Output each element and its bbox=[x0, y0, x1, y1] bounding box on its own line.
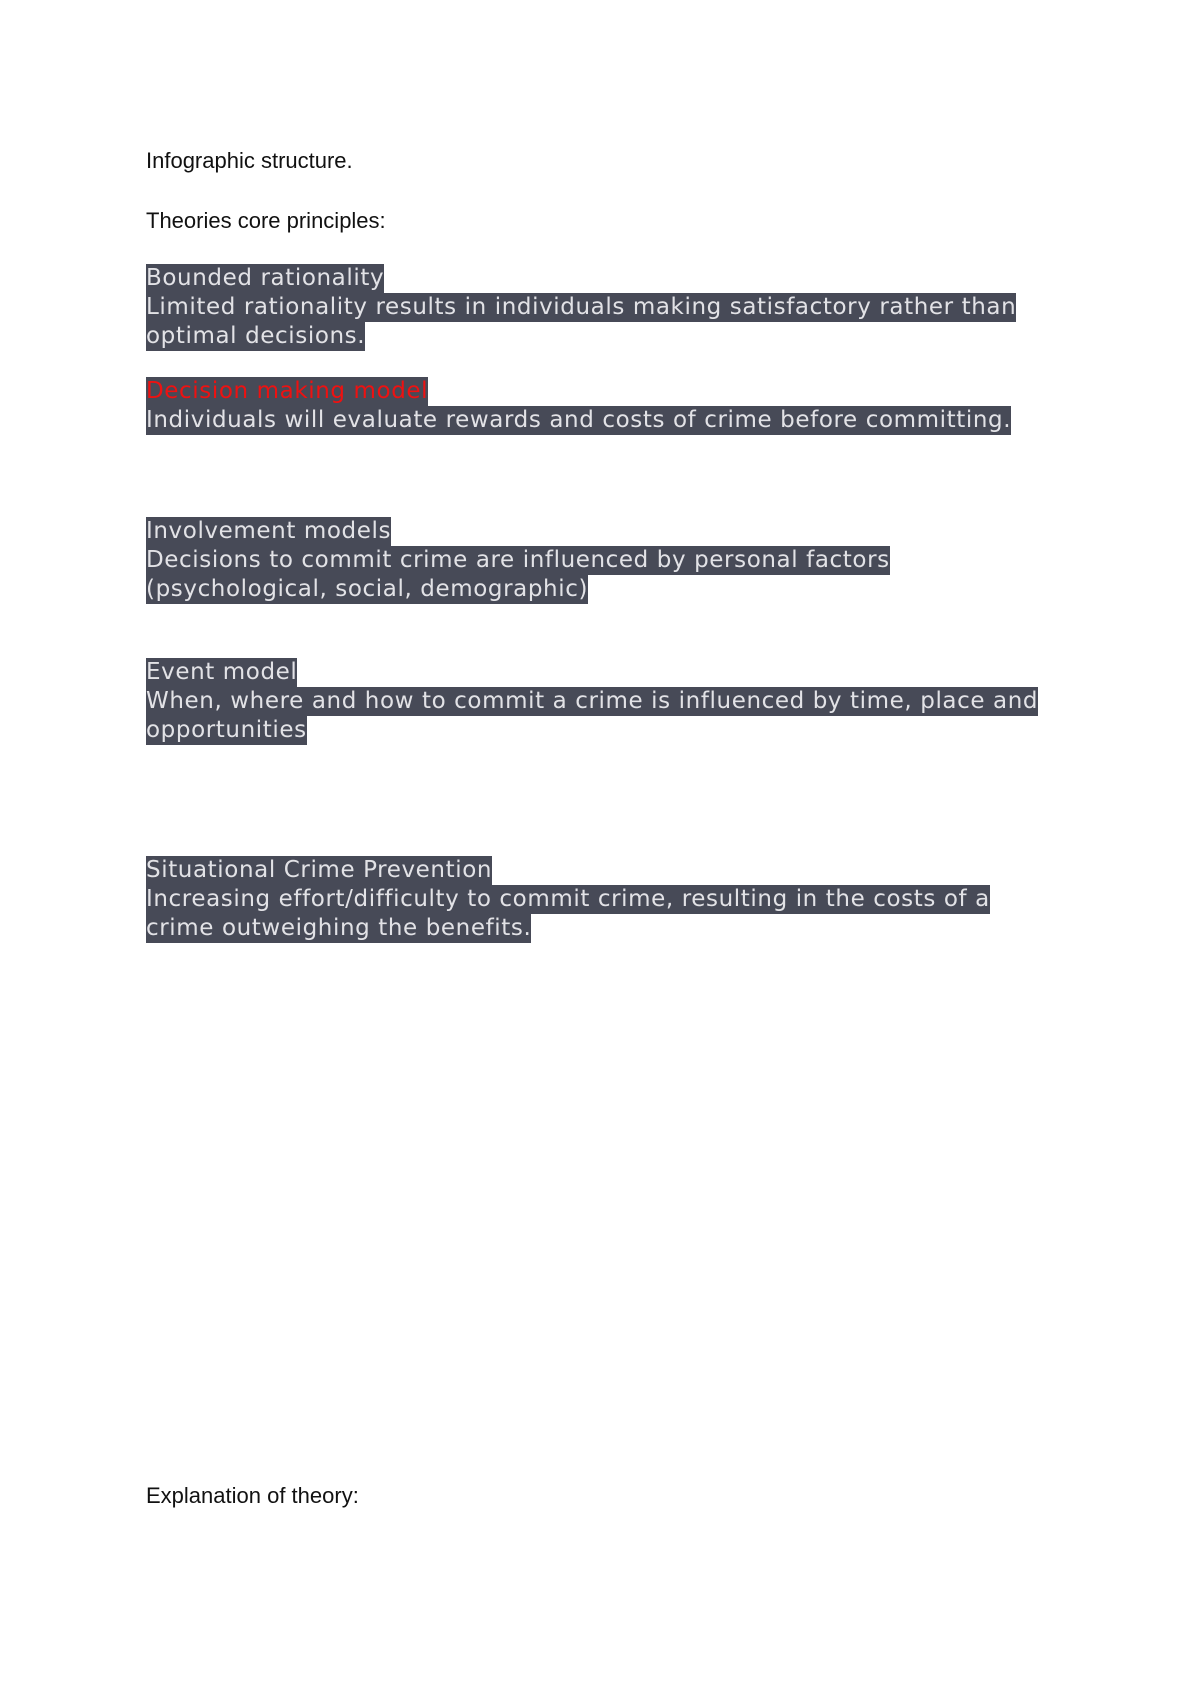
text block: involvement models bbox=[146, 517, 890, 604]
text block: event model: opportunities bbox=[146, 717, 307, 743]
text block: involvement models: Involvement models bbox=[146, 518, 391, 544]
text block: bounded rationality: Bounded rationality bbox=[146, 265, 384, 291]
heading: explanation of theory: Explanation of theory: bbox=[146, 1483, 359, 1508]
text block: situational crime prevention: Situational Crime Prevention bbox=[146, 857, 492, 883]
text block: decision making model: Decision making model bbox=[146, 378, 428, 404]
text block: bounded rationality: optimal decisions. bbox=[146, 323, 365, 349]
text block: involvement models: (psychological, social, demographic) bbox=[146, 576, 588, 602]
text block: involvement models: Decisions to commit crime are influenced by personal factors bbox=[146, 547, 890, 573]
text block: bounded rationality bbox=[146, 264, 1016, 351]
text block: bounded rationality: Limited rationality results in individuals making satisfactory rather than bbox=[146, 294, 1016, 320]
text block: decision making model bbox=[146, 377, 1011, 435]
text block: situational crime prevention: crime outweighing the benefits. bbox=[146, 915, 531, 941]
text block: event model: Event model bbox=[146, 659, 297, 685]
text block: event model bbox=[146, 658, 1038, 745]
text block: situational crime prevention: Increasing effort/difficulty to commit crime, resulting in the costs of a bbox=[146, 886, 990, 912]
text block: event model: When, where and how to commit a crime is influenced by time, place and bbox=[146, 688, 1038, 714]
heading: theories core principles: Theories core principles: bbox=[146, 208, 386, 233]
text block: situational crime prevention bbox=[146, 856, 990, 943]
heading: infographic structure: Infographic structure. bbox=[146, 148, 353, 173]
text block: decision making model: Individuals will evaluate rewards and costs of crime before committing. bbox=[146, 407, 1011, 433]
